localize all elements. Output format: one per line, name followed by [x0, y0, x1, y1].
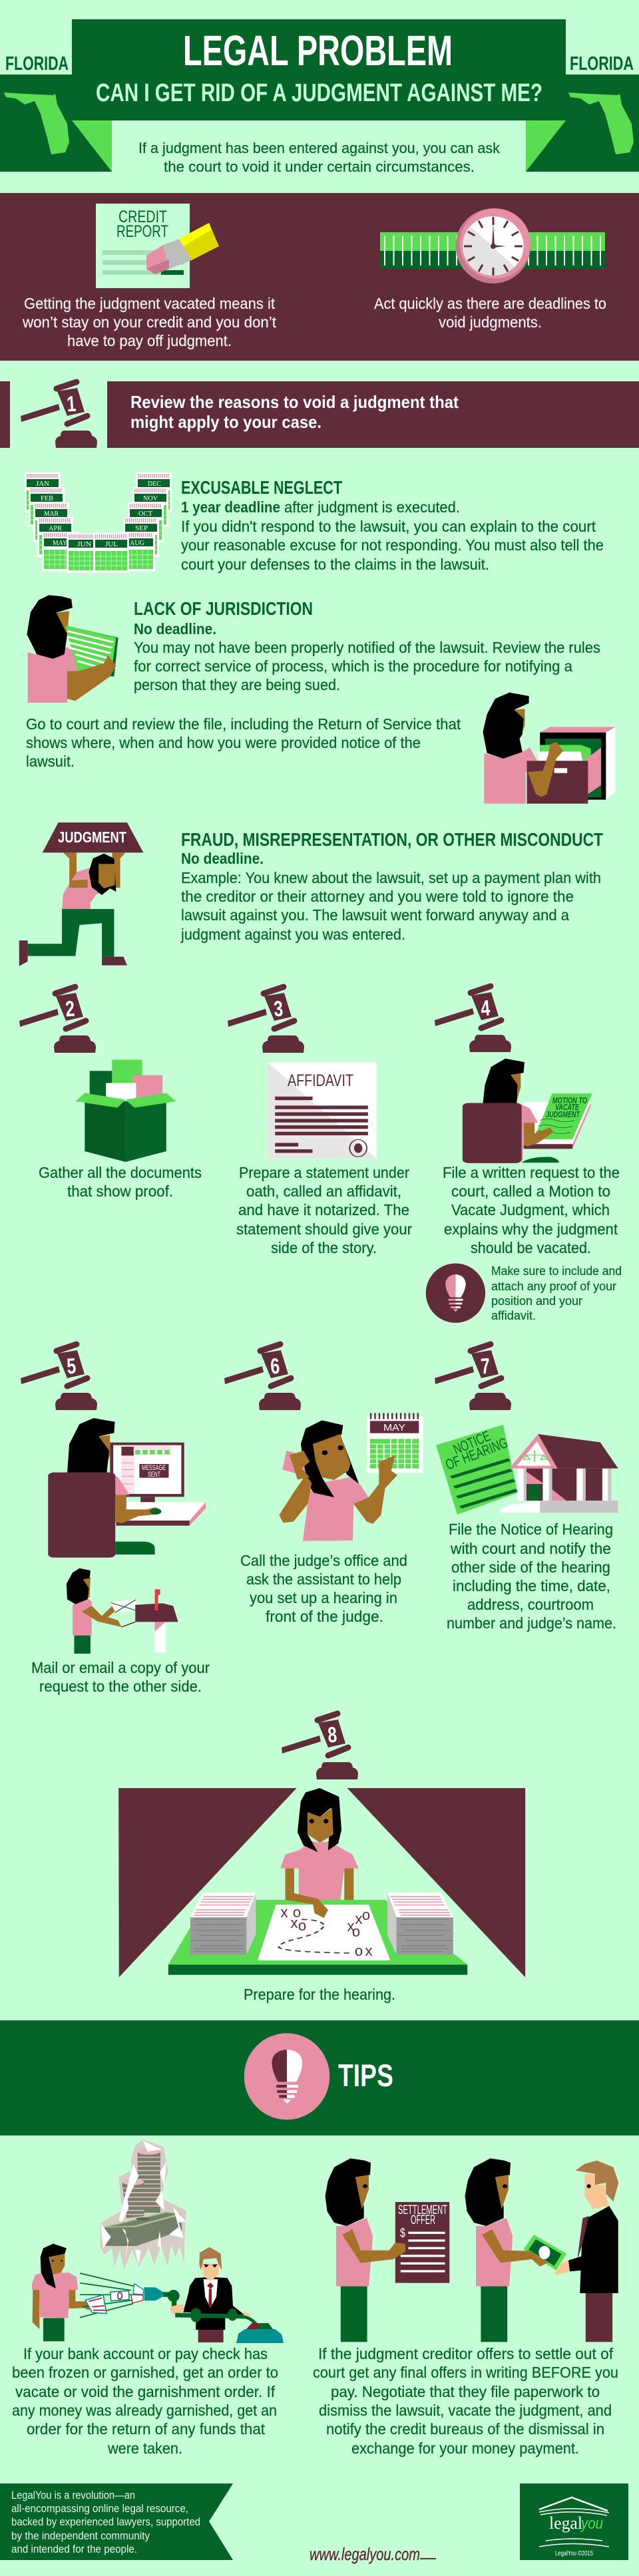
icon: gavel 7	[435, 1344, 511, 1410]
footer about banner	[0, 2484, 233, 2560]
illustration: woman with motion to vacate: JUDGMENT	[546, 1109, 580, 1119]
text: tip settlement	[313, 2345, 618, 2457]
icon: gavel 8: 8	[327, 1723, 337, 1748]
text: tip settlement: notify the credit bureaus of the dismissal in	[326, 2420, 604, 2438]
text block: fraud	[180, 829, 603, 943]
icon: gavel 1: 1	[66, 392, 77, 417]
text block: go to court	[26, 715, 461, 770]
icon: gavel 3	[228, 987, 304, 1053]
text: tip settlement: If the judgment creditor offers to settle out of	[318, 2345, 614, 2362]
illustration: affidavit document: AFFIDAVIT	[288, 1071, 353, 1090]
icon: lightbulb tip	[426, 1264, 485, 1323]
panel: step 1 band	[0, 381, 639, 448]
illustration: notice of hearing	[436, 1425, 517, 1515]
panel: benefits and deadlines	[0, 193, 639, 361]
text: step 7: number and judge’s name.	[447, 1614, 616, 1632]
footer about banner: all-encompassing online legal resource,	[11, 2502, 188, 2515]
illustration: woman on phone	[279, 1420, 397, 1541]
illustration: woman preparing at table under spotlight: x	[290, 1915, 298, 1931]
text block: excusable neglect: your reasonable excuse for not responding. You must also tell the	[181, 536, 604, 554]
text block: excusable neglect	[181, 477, 604, 573]
text: tip frozen account: were taken.	[107, 2440, 182, 2457]
illustration: woman with settlement offer: SETTLEMENT	[398, 2203, 447, 2217]
text: tip settlement: dismiss the lawsuit, vacate the judgment, and	[319, 2402, 612, 2419]
text: tip frozen account: vacate or void the garnishment order. If	[15, 2383, 276, 2400]
text: step 3	[236, 1164, 412, 1256]
icon: twelve month calendars	[25, 472, 172, 573]
footer about banner: and intended for the people.	[11, 2543, 137, 2555]
text: tip frozen account: any money was already garnished, get an	[12, 2402, 277, 2419]
text: act quickly	[374, 295, 606, 331]
text: step 6: front of the judge.	[266, 1608, 383, 1625]
text: step 7: with court and notify the	[450, 1540, 611, 1557]
text block: excusable neglect: after judgment is executed.	[284, 498, 460, 516]
title banner: LEGAL PROBLEM	[183, 27, 453, 75]
icon: Florida map right	[568, 92, 634, 154]
text block: lack of jurisdiction: person that they are being sued.	[134, 676, 340, 693]
illustration: affidavit document	[268, 1062, 377, 1159]
intro text: the court to void it under certain circumstances.	[164, 158, 475, 175]
illustration: woman preparing at table under spotlight: o	[362, 1907, 370, 1923]
panel: tips header: TIPS	[338, 2058, 393, 2093]
icon: gavel 6	[224, 1344, 301, 1410]
illustration: woman at computer	[48, 1418, 206, 1558]
text: step 2: that show proof.	[67, 1183, 173, 1200]
illustration: woman holding up judgment	[19, 823, 143, 966]
text: step 4: Vacate Judgment, which	[451, 1201, 610, 1218]
text: step 4	[443, 1164, 620, 1256]
text: tip make sure to include: attach any proof of your	[491, 1280, 616, 1293]
illustration: woman holding up judgment: JUDGMENT	[58, 828, 126, 846]
illustration: woman preparing at table under spotlight: o	[298, 1917, 306, 1934]
icon: gavel 3: 3	[273, 997, 284, 1021]
illustration: woman preparing at table under spotlight: o	[293, 1904, 301, 1921]
footer about banner: backed by experienced lawyers, supported	[11, 2515, 200, 2528]
illustration: woman at file cabinet	[483, 693, 615, 804]
icon: twelve month calendars: AUG	[130, 540, 144, 547]
text: tip frozen account	[12, 2345, 278, 2457]
text: tip frozen account: been frozen or garnished, get an order to	[12, 2364, 278, 2381]
text: step 4: File a written request to the	[443, 1164, 620, 1181]
icon: twelve month calendars: MAY	[53, 540, 67, 547]
text block: fraud: No deadline.	[181, 850, 264, 867]
icon: gavel 5	[21, 1344, 97, 1410]
illustration: woman at computer: SENT	[148, 1471, 160, 1479]
text block: excusable neglect: 1 year deadline	[181, 498, 280, 516]
text: step 7: address, courtroom	[467, 1596, 594, 1613]
icon: twelve month calendars: SEP	[135, 525, 148, 532]
illustration: woman preparing at table under spotlight: x	[365, 1942, 373, 1959]
illustration: woman preparing at table under spotlight: o	[352, 1923, 360, 1940]
text: step 6	[240, 1552, 407, 1625]
icon: Florida map left	[4, 92, 69, 154]
icon: twelve month calendars: FEB	[41, 495, 53, 502]
illustration: calendar May: MAY	[383, 1422, 405, 1433]
intro text	[138, 140, 501, 175]
logo: legalyou: LegalYou ©2015	[555, 2550, 593, 2557]
illustration: woman paying man	[465, 2158, 618, 2342]
illustration: woman at computer: MESSAGE	[142, 1464, 166, 1472]
text block: lack of jurisdiction: for correct service of process, which is the procedure for notifying a	[134, 657, 572, 675]
illustration: woman at mailbox	[67, 1568, 178, 1654]
text block: fraud: lawsuit against you. The lawsuit went forward anyway and a	[181, 906, 569, 924]
illustration: woman preparing at table under spotlight: x	[347, 1918, 354, 1934]
text: step 6: Call the judge’s office and	[240, 1552, 407, 1569]
text: step 5: request to the other side.	[39, 1678, 202, 1695]
text: tip settlement: exchange for your money payment.	[351, 2440, 579, 2457]
text: tip frozen account: order for the return of any funds that	[27, 2420, 266, 2438]
illustration: box of documents	[76, 1059, 176, 1162]
illustration: woman reading book	[27, 595, 118, 703]
illustration: woman preparing at table under spotlight	[118, 1788, 525, 1977]
text: step 4: should be vacated.	[471, 1239, 591, 1256]
text: tip make sure to include: position and your	[491, 1294, 582, 1308]
icon: gavel 2	[19, 987, 96, 1053]
text: step 3: side of the story.	[271, 1239, 377, 1256]
text block: lack of jurisdiction	[134, 598, 600, 693]
illustration: notice of hearing: OF HEARING	[443, 1434, 510, 1473]
text: step 3: oath, called an affidavit,	[246, 1183, 401, 1200]
text: tip settlement: court get any final offers in writing BEFORE you	[313, 2364, 618, 2381]
text: step 7: other side of the hearing	[451, 1559, 610, 1576]
icon: credit report with eraser: CREDIT	[118, 208, 167, 226]
text: step 4: court, called a Motion to	[451, 1183, 610, 1200]
logo: legalyou: you	[580, 2515, 603, 2533]
Florida label left: FLORIDA	[5, 53, 69, 75]
icon: twelve month calendars: JUL	[105, 541, 118, 548]
icon: gavel 7: 7	[480, 1354, 491, 1379]
panel: tips header	[0, 2020, 639, 2135]
text block: lack of jurisdiction: You may not have been properly notified of the lawsuit. Review the rules	[134, 639, 600, 656]
text: step 3: and have it notarized. The	[238, 1201, 409, 1218]
illustration: frozen money	[101, 2139, 186, 2269]
illustration: woman with settlement offer: $	[400, 2227, 405, 2241]
illustration: woman preparing at table under spotlight: o	[355, 1942, 363, 1959]
illustration: woman with motion to vacate: VACATE	[555, 1102, 579, 1112]
text: step 6: you set up a hearing in	[250, 1589, 397, 1606]
text block: go to court: shows where, when and how you were provided notice of the	[26, 734, 421, 751]
icon: gavel 1	[21, 382, 97, 448]
text block: lack of jurisdiction: LACK OF JURISDICTION	[134, 598, 313, 619]
illustration: woman with settlement offer: OFFER	[411, 2213, 435, 2227]
icon: twelve month calendars: DEC	[148, 480, 161, 488]
panel: step 1 band: Review the reasons to void a judgment that	[130, 392, 459, 412]
illustration: woman preparing at table under spotlight: x	[281, 1904, 288, 1921]
illustration: courthouse	[501, 1434, 618, 1513]
text: act quickly: Act quickly as there are deadlines to	[374, 295, 606, 312]
text: step 3: statement should give your	[236, 1220, 412, 1238]
text: tip make sure to include: Make sure to include and	[491, 1264, 622, 1278]
text block: go to court: lawsuit.	[26, 753, 75, 770]
woman with frozen pay check	[32, 2244, 99, 2341]
icon: tips lightbulb	[244, 2033, 329, 2119]
icon: gavel 4: 4	[480, 996, 491, 1021]
logo: legalyou: legal	[549, 2513, 582, 2533]
text block: excusable neglect: EXCUSABLE NEGLECT	[181, 477, 342, 498]
panel: step 1 band: might apply to your case.	[130, 412, 321, 432]
logo: legalyou	[520, 2484, 628, 2560]
text: getting judgment vacated	[22, 295, 277, 349]
text: step 4: explains why the judgment	[444, 1220, 618, 1238]
illustration: garnishment vacuum	[32, 2244, 284, 2343]
illustration: woman preparing at table under spotlight: x	[355, 1911, 362, 1927]
icon: twelve month calendars: APR	[49, 525, 62, 532]
text: step 6: ask the assistant to help	[246, 1570, 401, 1588]
icon: watch	[380, 208, 605, 283]
text: step 7: File the Notice of Hearing	[449, 1521, 613, 1538]
text block: fraud: judgment against you was entered.	[180, 926, 405, 943]
vacuum beam and bills	[80, 2273, 180, 2318]
text: act quickly: void judgments.	[439, 313, 542, 331]
icon: credit report with eraser	[96, 204, 219, 288]
icon: twelve month calendars: OCT	[138, 510, 152, 518]
illustration: notice of hearing: NOTICE	[451, 1427, 493, 1458]
title banner	[0, 19, 639, 172]
text: step 8: Prepare for the hearing.	[244, 1986, 395, 2003]
text: step 3: Prepare a statement under	[239, 1164, 409, 1181]
icon: twelve month calendars: MAR	[44, 510, 59, 518]
illustration: woman with motion to vacate	[463, 1059, 592, 1163]
footer about banner: by the independent community	[11, 2529, 150, 2542]
text block: excusable neglect: If you didn't respond to the lawsuit, you can explain to the court	[181, 518, 596, 535]
text block: fraud: Example: You knew about the lawsuit, set up a payment plan with	[181, 869, 601, 886]
text: getting judgment vacated: won’t stay on your credit and you don’t	[22, 313, 277, 331]
text: step 2: Gather all the documents	[39, 1164, 202, 1181]
icon: gavel 4	[435, 986, 511, 1052]
footer about banner: LegalYou is a revolution—an	[11, 2489, 135, 2501]
text: tip make sure to include	[491, 1264, 622, 1322]
text block: excusable neglect: court your defenses to the claims in the lawsuit.	[181, 556, 489, 573]
text: step 7	[447, 1521, 616, 1632]
icon: credit report with eraser: REPORT	[116, 222, 168, 241]
icon: twelve month calendars: JAN	[36, 480, 49, 488]
text: step 2	[39, 1164, 202, 1200]
icon: gavel 2: 2	[65, 997, 75, 1021]
text: getting judgment vacated: Getting the judgment vacated means it	[24, 295, 276, 312]
illustration: woman with settlement offer	[325, 2158, 449, 2342]
text: step 5	[31, 1659, 210, 1695]
illustration: calendar May	[367, 1416, 423, 1473]
text: step 7: including the time, date,	[453, 1577, 610, 1594]
icon: twelve month calendars: NOV	[143, 495, 158, 502]
icon: twelve month calendars: JUN	[77, 541, 91, 548]
icon: gavel 5: 5	[66, 1354, 77, 1379]
text: tip settlement: pay. Negotiate that they file paperwork to	[331, 2383, 600, 2400]
illustration: woman with motion to vacate: MOTION TO	[552, 1095, 587, 1105]
icon: gavel 8	[282, 1714, 358, 1779]
text: getting judgment vacated: have to pay off judgment.	[67, 332, 232, 349]
website url: www.legalyou.com	[310, 2544, 420, 2564]
icon: gavel 6: 6	[270, 1354, 280, 1379]
text block: go to court: Go to court and review the file, including the Return of Service that	[26, 715, 461, 733]
text: tip make sure to include: affidavit.	[491, 1309, 536, 1322]
man with hose	[170, 2247, 284, 2343]
text block: lack of jurisdiction: No deadline.	[134, 620, 216, 638]
text block: fraud: the creditor or their attorney and you were told to ignore the	[181, 888, 574, 905]
intro text: If a judgment has been entered against you, you can ask	[138, 140, 501, 156]
text: tip frozen account: If your bank account or pay check has	[23, 2345, 268, 2362]
text: step 5: Mail or email a copy of your	[31, 1659, 210, 1676]
